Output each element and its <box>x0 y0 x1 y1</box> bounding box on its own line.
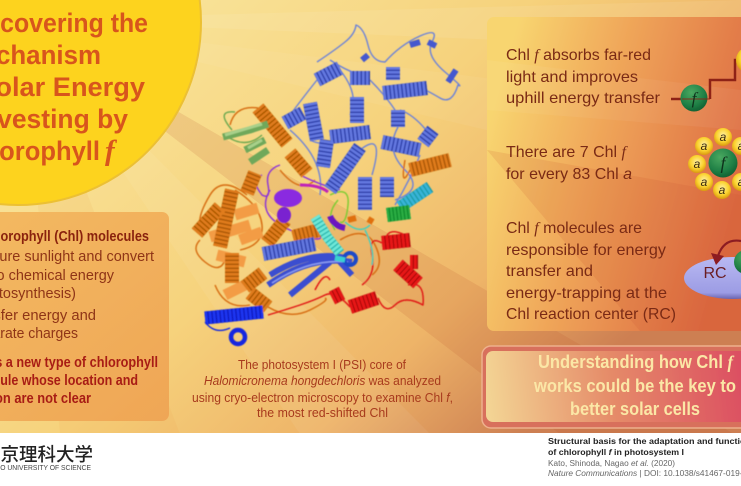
icon: reaction center <box>684 241 741 299</box>
text block: energy trapping: Chl f molecules are <box>506 220 642 237</box>
caption: PSI core analysis: The photosystem I (PSI) core of <box>238 358 406 372</box>
text block: ratio of Chl f to Chl a <box>506 144 632 183</box>
icon: Chl f surrounded by Chl a: a <box>720 130 727 144</box>
icon: Chl f surrounded by Chl a: a <box>719 183 726 197</box>
citation: Kato, Shinoda, Nagao et al. (2020) <box>548 458 675 468</box>
caption: PSI core analysis: Halomicronema hongdechloris was analyzed <box>204 374 441 388</box>
text block: uphill energy transfer <box>506 47 661 107</box>
loops <box>196 25 460 315</box>
caption: PSI core analysis <box>192 358 453 420</box>
callout: solar cells: better solar cells <box>570 399 700 419</box>
green sheet <box>223 124 268 162</box>
arrow: energy to RC <box>711 241 741 265</box>
text block: roles of chlorophyll <box>0 249 154 342</box>
text block: energy trapping: responsible for energy <box>506 242 666 259</box>
icon: uphill energy staircase <box>671 47 741 112</box>
blue beta sheets <box>268 256 352 295</box>
text block: energy trapping <box>506 220 676 323</box>
sun circle with title <box>0 0 201 205</box>
red helices <box>332 240 418 307</box>
purple helices and blobs <box>300 185 328 192</box>
text block: uphill energy transfer: uphill energy transfer <box>506 90 661 107</box>
callout: solar cells: Understanding how Chl f <box>538 352 735 372</box>
icon: Chl f surrounded by Chl a: a <box>694 157 701 171</box>
orange helices <box>197 108 450 307</box>
title: f <box>105 135 118 167</box>
citation <box>548 436 741 478</box>
protein structure of photosystem I <box>196 25 460 344</box>
cyan and green helices <box>400 187 430 207</box>
icon: Chl f surrounded by Chl a <box>688 128 741 199</box>
title <box>0 8 148 167</box>
panel: chlorophyll f findings <box>487 17 741 331</box>
callout: solar cells <box>482 346 741 428</box>
light orange helices <box>210 208 262 295</box>
caption: PSI core analysis: using cryo-electron microscopy to examine Chl f, <box>192 391 453 405</box>
text block: ratio of Chl f to Chl a: for every 83 Chl a <box>506 166 632 183</box>
caption: PSI core analysis: the most red-shifted Chl <box>257 406 388 420</box>
text block: energy trapping: transfer and <box>506 263 593 280</box>
icon: uphill energy staircase: f <box>692 89 699 108</box>
blue helices <box>263 67 433 254</box>
icon: Chl f surrounded by Chl a: a <box>701 139 708 153</box>
text block: energy trapping: energy-trapping at the <box>506 285 667 302</box>
text block: energy trapping: Chl reaction center (RC) <box>506 306 676 323</box>
icon: reaction center: RC <box>703 265 727 282</box>
text block: uphill energy transfer: Chl f absorbs far-red <box>506 47 651 64</box>
footer <box>0 433 741 486</box>
bright blue helix <box>205 312 263 318</box>
text block: new chlorophyll type <box>0 355 158 407</box>
citation: of chlorophyll f in photosystem I <box>548 447 684 457</box>
icon: Chl f surrounded by Chl a: a <box>701 175 708 189</box>
icon: Chl f surrounded by Chl a: f <box>720 153 728 173</box>
text block: uphill energy transfer: light and improves <box>506 69 638 86</box>
citation: Structural basis for the adaptation and function <box>548 436 741 446</box>
text block: ratio of Chl f to Chl a: There are 7 Chl f <box>506 144 629 161</box>
panel: chlorophyll facts <box>0 212 169 421</box>
small blue ribbons <box>362 42 456 82</box>
